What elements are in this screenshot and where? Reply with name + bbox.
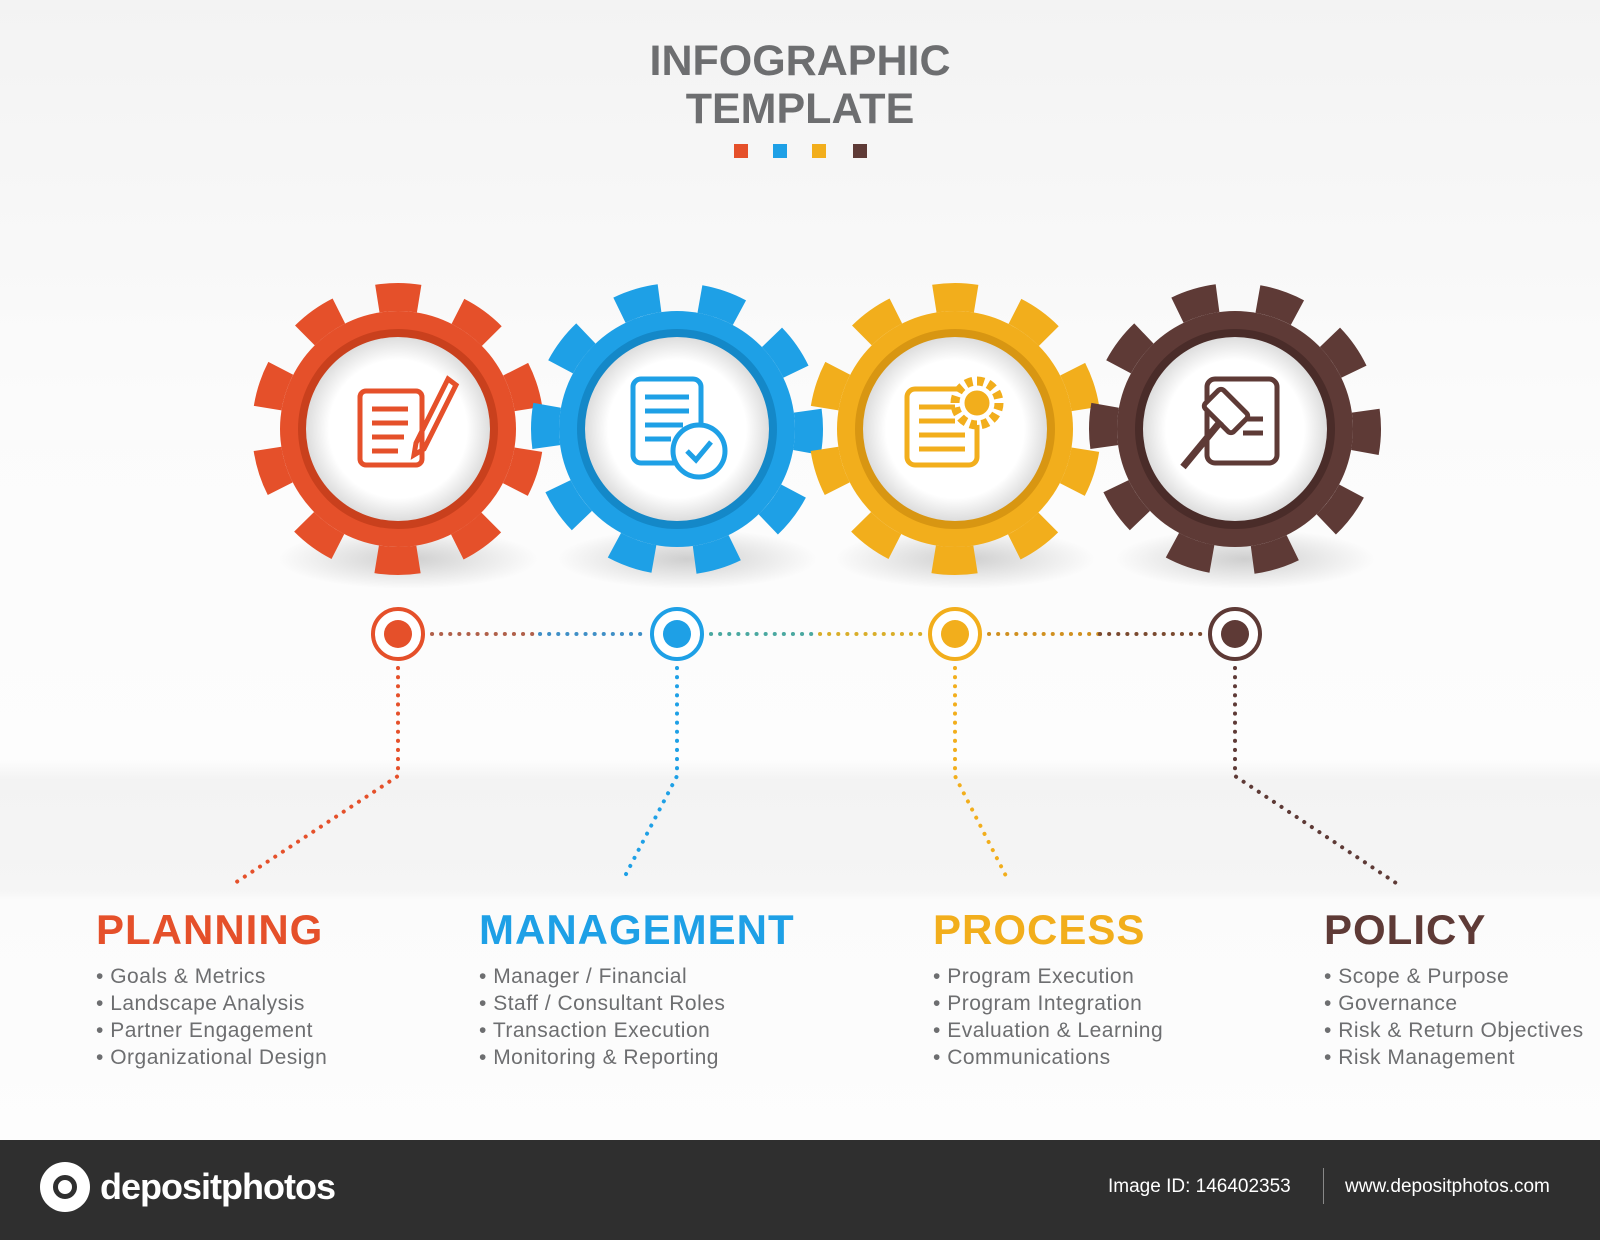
column: policy: Governance [1338, 992, 1458, 1015]
column: policy: POLICY [1324, 906, 1486, 953]
column: management [479, 906, 795, 1069]
icon: document gear [907, 381, 999, 465]
column: planning: Organizational Design [110, 1046, 327, 1069]
icon: document check [633, 379, 725, 477]
gear: policy [1082, 276, 1388, 589]
column: management: MANAGEMENT [479, 906, 795, 953]
column: policy: Scope & Purpose [1338, 965, 1509, 988]
footer bar [0, 1140, 1600, 1240]
column: management: Manager / Financial [493, 965, 687, 988]
title [650, 37, 950, 158]
column: planning: Partner Engagement [110, 1019, 313, 1042]
title: INFOGRAPHIC [650, 37, 950, 85]
column: process: PROCESS [933, 906, 1145, 953]
column: planning: Landscape Analysis [110, 992, 305, 1015]
icon: document pencil [360, 379, 456, 465]
column: policy [1324, 906, 1584, 1069]
logo: depositphotos [100, 1166, 335, 1207]
column: planning [96, 906, 327, 1069]
title: TEMPLATE [686, 85, 914, 133]
column: process: Program Execution [947, 965, 1134, 988]
color squares [734, 144, 867, 158]
column: process [933, 906, 1163, 1069]
column: policy: Risk & Return Objectives [1338, 1019, 1584, 1042]
column: process: Evaluation & Learning [947, 1019, 1163, 1042]
logo [40, 1162, 335, 1212]
column: management: Transaction Execution [493, 1019, 710, 1042]
gear: planning [247, 278, 549, 589]
column: management: Monitoring & Reporting [493, 1046, 719, 1069]
column: process: Communications [947, 1046, 1111, 1069]
timeline dotted connectors [235, 634, 1396, 883]
gear: management [524, 276, 830, 589]
gear: process [804, 278, 1106, 589]
column: planning: Goals & Metrics [110, 965, 266, 988]
column: policy: Risk Management [1338, 1046, 1515, 1069]
image id: Image ID: 146402353 [1108, 1176, 1291, 1197]
column: planning: PLANNING [96, 906, 323, 953]
column: management: Staff / Consultant Roles [493, 992, 725, 1015]
timeline nodes [373, 609, 1260, 659]
footer bar: www.depositphotos.com [1345, 1176, 1550, 1197]
icon: gavel document [1183, 379, 1277, 467]
column: process: Program Integration [947, 992, 1142, 1015]
